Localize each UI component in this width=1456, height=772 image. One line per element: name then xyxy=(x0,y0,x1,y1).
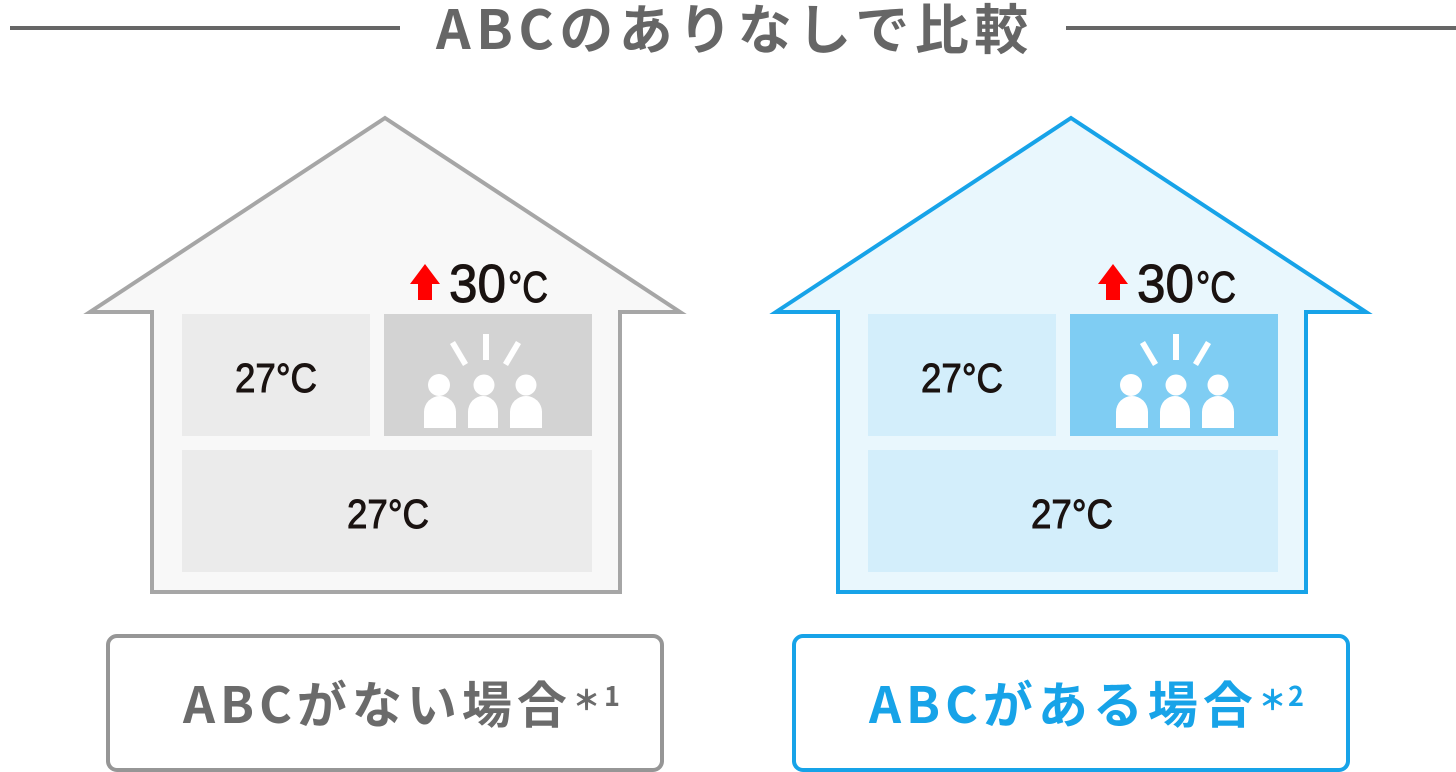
room: lower xyxy=(182,450,592,572)
temperature 30: °C xyxy=(1196,263,1236,312)
title xyxy=(10,0,1456,65)
label box: with ABC xyxy=(794,636,1348,770)
temperature 30: °C xyxy=(508,263,548,312)
label box: with ABC: ABCがある場合 xyxy=(868,666,1258,738)
label box: without ABC: ＊ xyxy=(573,679,600,718)
panel: house with ABC xyxy=(776,118,1366,592)
icon: red up arrow xyxy=(410,264,440,300)
room: upper left: 27°C xyxy=(921,355,1003,401)
label box: with ABC: 2 xyxy=(1288,675,1304,714)
label box: without ABC xyxy=(108,636,662,770)
room: lower: 27°C xyxy=(347,491,429,537)
icon: people xyxy=(1116,334,1234,428)
label box: with ABC: ＊ xyxy=(1259,679,1286,718)
room: upper left xyxy=(182,314,370,436)
temperature 30: 30 xyxy=(449,254,506,314)
label box: without ABC: ABCがない場合 xyxy=(182,666,572,738)
temperature 30 xyxy=(1137,254,1236,314)
temperature 30 xyxy=(449,254,548,314)
house outline xyxy=(776,118,1366,592)
room: upper right with people xyxy=(1070,314,1278,436)
icon: people xyxy=(424,334,542,428)
icon: red up arrow xyxy=(1098,264,1128,300)
temperature 30: 30 xyxy=(1137,254,1194,314)
room: lower: 27°C xyxy=(1031,491,1113,537)
panel: house without ABC xyxy=(90,118,680,592)
house outline xyxy=(90,118,680,592)
room: upper left: 27°C xyxy=(235,355,317,401)
label box: without ABC: 1 xyxy=(604,675,620,714)
room: lower xyxy=(868,450,1278,572)
room: upper left xyxy=(868,314,1056,436)
room: upper right with people xyxy=(384,314,592,436)
